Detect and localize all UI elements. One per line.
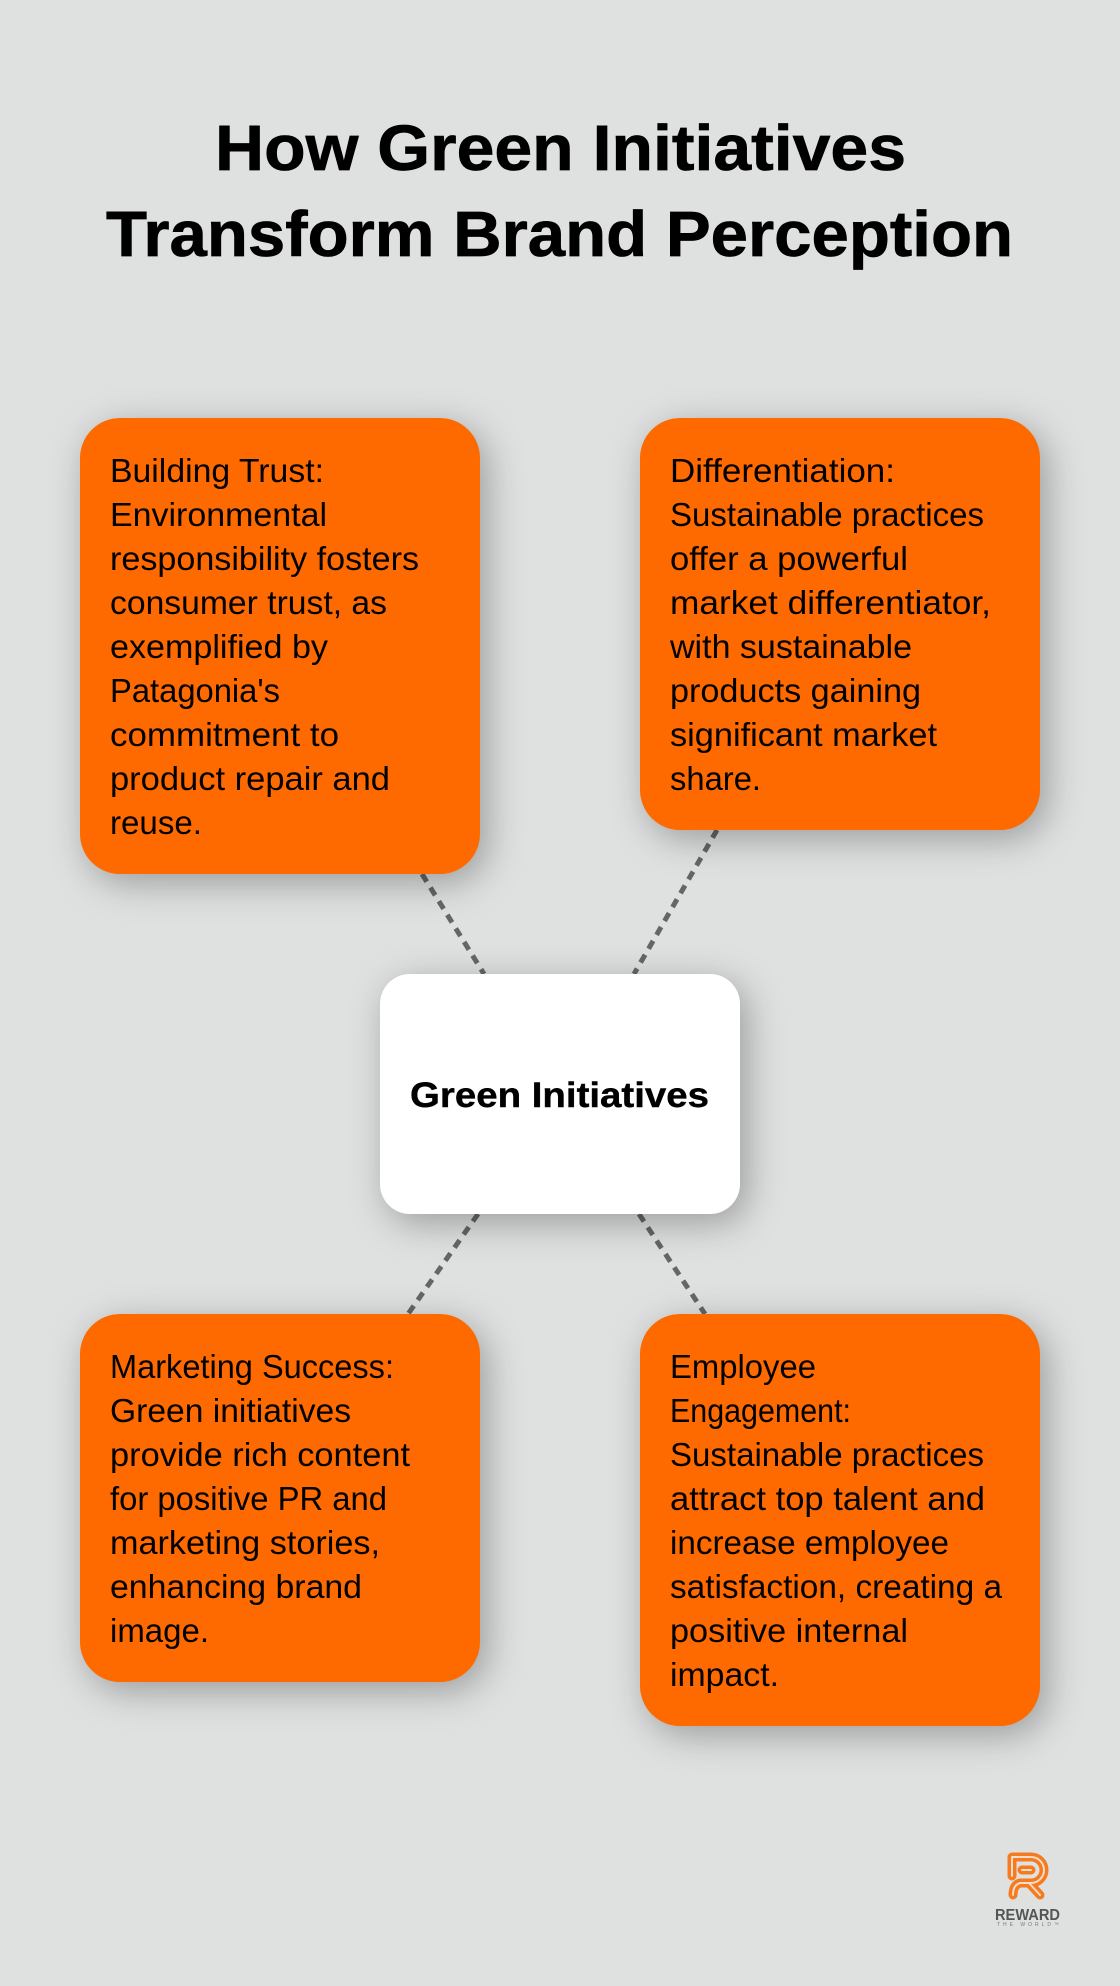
title: Transform Brand Perception: [106, 198, 1013, 270]
panel: employee engagement: satisfaction, creating a: [670, 1568, 1003, 1605]
logo: reward the world: REWARD: [995, 1907, 1060, 1924]
panel: marketing success: image.: [110, 1612, 209, 1649]
icon: stylised R: [1012, 1857, 1044, 1895]
panel: building trust: Building Trust:: [110, 452, 324, 489]
panel: building trust: [80, 418, 480, 874]
logo: reward the world: [995, 1857, 1060, 1928]
panel: building trust: reuse.: [110, 804, 202, 841]
panel: employee engagement: [640, 1314, 1040, 1726]
panel: building trust: commitment to: [110, 716, 339, 753]
panel: marketing success: [80, 1314, 480, 1682]
panel: employee engagement: Engagement:: [670, 1392, 851, 1429]
panel: employee engagement: Employee: [670, 1348, 816, 1385]
logo: reward the world: THE WORLD™: [997, 1922, 1059, 1928]
panel: marketing success: enhancing brand: [110, 1568, 362, 1605]
panel: building trust: responsibility fosters: [110, 540, 419, 577]
panel: marketing success: Marketing Success:: [110, 1348, 394, 1385]
panel: marketing success: provide rich content: [110, 1436, 410, 1473]
title: [106, 112, 1013, 270]
panel: building trust: Environmental: [110, 496, 327, 533]
panel: differentiation: Sustainable practices: [670, 496, 984, 533]
panel: employee engagement: impact.: [670, 1656, 779, 1693]
panel: building trust: consumer trust, as: [110, 584, 387, 621]
panel: differentiation: products gaining: [670, 672, 921, 709]
connector: differentiation to center: [634, 830, 717, 974]
panel: green initiatives center: [380, 974, 740, 1214]
panel: building trust: product repair and: [110, 760, 390, 797]
panel: employee engagement: increase employee: [670, 1524, 949, 1561]
panel: employee engagement: Sustainable practices: [670, 1436, 984, 1473]
panel: building trust: Patagonia's: [110, 672, 280, 709]
connector: marketing success to center: [408, 1214, 478, 1314]
panel: differentiation: Differentiation:: [670, 452, 895, 489]
panel: differentiation: significant market: [670, 716, 937, 753]
panel: differentiation: [640, 418, 1040, 830]
connector: employee engagement to center: [639, 1214, 705, 1314]
panel: green initiatives center: Green Initiatives: [410, 1076, 709, 1115]
panel: marketing success: for positive PR and: [110, 1480, 387, 1517]
panel: employee engagement: attract top talent and: [670, 1480, 985, 1517]
panel: building trust: exemplified by: [110, 628, 329, 665]
panel: differentiation: with sustainable: [669, 628, 912, 665]
panel: differentiation: market differentiator,: [670, 584, 991, 621]
panel: employee engagement: positive internal: [670, 1612, 908, 1649]
panel: marketing success: Green initiatives: [110, 1392, 351, 1429]
panel: differentiation: share.: [670, 760, 761, 797]
panel: differentiation: offer a powerful: [670, 540, 908, 577]
title: How Green Initiatives: [215, 112, 906, 184]
connector: building trust to center: [422, 874, 484, 974]
panel: marketing success: marketing stories,: [110, 1524, 380, 1561]
